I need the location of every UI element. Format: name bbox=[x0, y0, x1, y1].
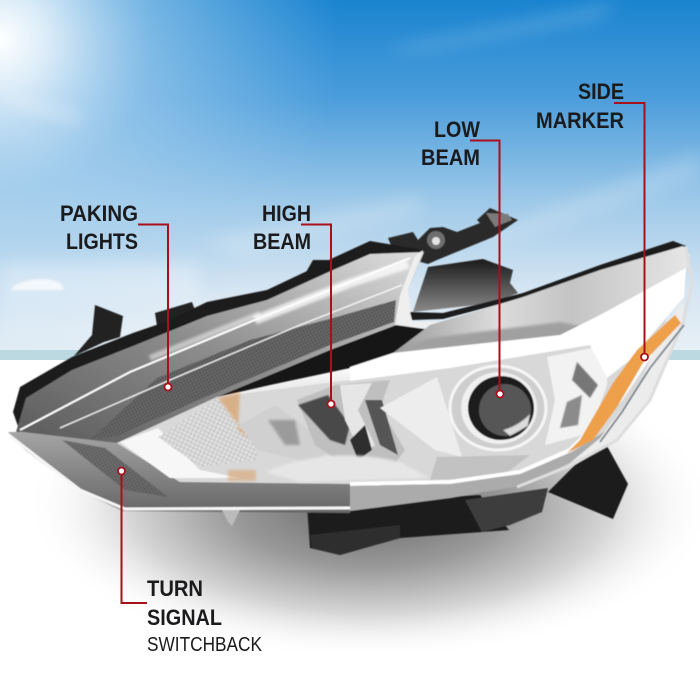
left clip tab bbox=[74, 305, 123, 356]
callout: turn signal: SWITCHBACK bbox=[147, 634, 263, 656]
projector lens bbox=[450, 366, 546, 450]
ground with shadow bbox=[0, 350, 700, 700]
sea horizon band bbox=[0, 350, 700, 361]
callout: high beam bbox=[253, 201, 334, 408]
amber side marker bbox=[567, 315, 681, 453]
chrome neck of wing bbox=[395, 250, 470, 335]
callout: parking lights: PAKING bbox=[60, 201, 138, 226]
housing dark top edge bbox=[13, 241, 423, 432]
top mounting bracket bbox=[388, 208, 518, 264]
left white reflector strip bbox=[120, 428, 240, 478]
triangular reflector bbox=[380, 377, 462, 457]
bottom black mount bbox=[307, 495, 509, 555]
callout: high beam: HIGH bbox=[262, 201, 311, 226]
lower-left turn signal fin bbox=[8, 432, 350, 513]
callout: high beam: BEAM bbox=[253, 229, 311, 254]
right clear lens edge bbox=[570, 300, 684, 463]
small tabs on top edge bbox=[155, 302, 197, 326]
upper lens section bbox=[393, 246, 690, 353]
wing chrome body bbox=[16, 252, 424, 443]
right black bracket bbox=[548, 446, 628, 519]
callout: low beam: BEAM bbox=[421, 145, 480, 170]
black area beneath neck bbox=[217, 325, 432, 397]
headlight assembly bbox=[8, 208, 692, 555]
rear housing bbox=[413, 259, 518, 312]
wing mesh band bbox=[90, 300, 396, 440]
callout: side marker: MARKER bbox=[536, 108, 624, 133]
lens bottom bright edge bbox=[350, 340, 660, 484]
white chrome band bbox=[350, 268, 686, 381]
callout: parking lights: LIGHTS bbox=[66, 229, 138, 254]
lens bottom grey band bbox=[350, 425, 615, 511]
callout: side marker bbox=[536, 79, 648, 360]
callout: turn signal bbox=[118, 468, 263, 656]
reflector right panel bbox=[240, 405, 333, 463]
lens thin black upper line bbox=[410, 241, 686, 320]
sky background bbox=[0, 0, 700, 352]
callout: turn signal: SIGNAL bbox=[147, 605, 222, 630]
turn signal reflector mesh bbox=[158, 398, 257, 467]
reflector right of projector bbox=[545, 345, 607, 445]
callout: low beam: LOW bbox=[434, 117, 480, 142]
callout: low beam bbox=[421, 117, 504, 398]
callout: side marker: SIDE bbox=[578, 79, 624, 104]
callout: turn signal: TURN bbox=[147, 576, 203, 601]
small lower clip bbox=[222, 510, 240, 526]
callout: parking lights bbox=[60, 201, 172, 390]
wing highlights bbox=[20, 258, 410, 430]
main lens body bbox=[117, 290, 670, 484]
high beam chrome bulb area bbox=[297, 380, 405, 470]
lens lower dome bbox=[265, 455, 430, 482]
